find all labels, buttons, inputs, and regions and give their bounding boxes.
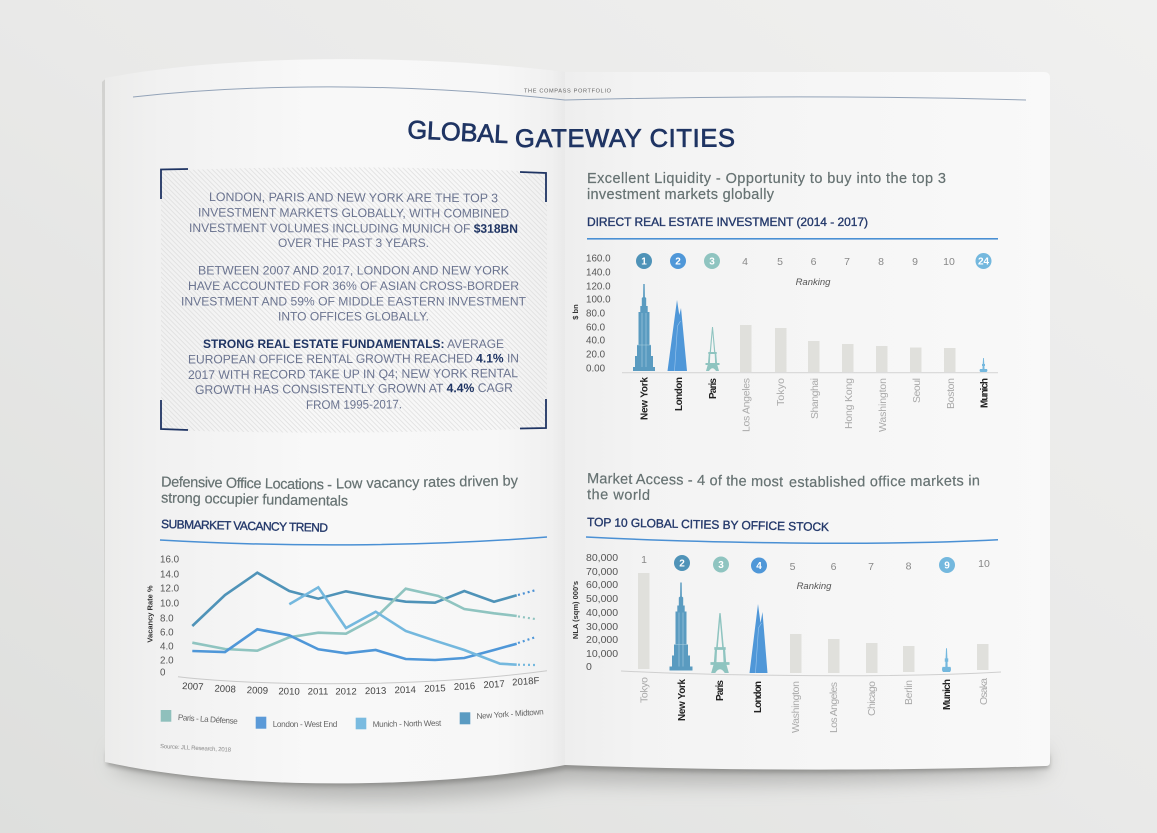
left page edge stack <box>102 78 108 762</box>
y axis labels: 60,000 <box>586 579 618 591</box>
title: GLOBAL <box>407 116 509 149</box>
y axis title: Vacancy Rate % <box>146 585 154 643</box>
rankings: 6 <box>831 561 837 573</box>
city labels: London <box>753 681 764 713</box>
y axis labels: 14.0 <box>160 570 180 580</box>
heading: investment markets globally <box>587 187 775 203</box>
x axis years: 2007 <box>182 681 204 693</box>
y axis labels <box>586 254 611 374</box>
y axis labels: 10,000 <box>586 648 618 660</box>
line: Paris - La Defense <box>192 589 535 651</box>
x axis years: 2012 <box>335 686 357 698</box>
city labels: Paris <box>715 680 726 701</box>
y axis labels: 80,000 <box>586 552 618 564</box>
rankings <box>636 253 992 269</box>
ranking caption: Ranking <box>797 581 832 592</box>
city labels: New York <box>677 679 688 721</box>
y axis labels: 2.0 <box>160 656 174 666</box>
y axis labels: 120.0 <box>586 282 611 292</box>
y axis labels: 20,000 <box>586 634 618 646</box>
y axis labels: 60.0 <box>586 322 606 334</box>
subheading: DIRECT REAL ESTATE INVESTMENT (2014 - 2017) <box>587 215 868 229</box>
paragraph 1: OVER THE PAST 3 YEARS. <box>278 236 429 250</box>
city labels: Paris <box>708 378 719 399</box>
source: Source: JLL Research, 2018 <box>160 744 232 754</box>
city labels: Los Angeles <box>740 378 752 432</box>
subheading: SUBMARKET VACANCY TREND <box>161 517 329 535</box>
y axis labels <box>160 554 180 678</box>
corner brackets <box>161 169 546 430</box>
rankings: 3 <box>709 256 715 268</box>
city labels <box>640 377 990 432</box>
paragraph 3: FROM 1995-2017. <box>306 397 402 412</box>
paragraph 1: INVESTMENT VOLUMES INCLUDING MUNICH OF $318BN <box>189 221 518 236</box>
paragraph 1: INVESTMENT MARKETS GLOBALLY, WITH COMBINED <box>198 206 509 221</box>
y axis labels: 0 <box>160 668 166 678</box>
y axis labels: 12.0 <box>160 584 180 594</box>
paragraph 3 <box>188 337 519 412</box>
x axis years: 2009 <box>247 685 268 697</box>
rankings: 8 <box>906 560 912 572</box>
y axis labels: 0 <box>586 661 592 673</box>
city labels: Hong Kong <box>843 378 855 429</box>
city labels: Tokyo <box>638 677 650 703</box>
y axis labels: 20.0 <box>586 350 606 360</box>
rankings: 1 <box>641 256 647 268</box>
rankings: 10 <box>943 256 955 268</box>
city labels: Los Angeles <box>828 682 840 733</box>
bars <box>740 325 956 372</box>
x axis years: 2013 <box>365 686 386 697</box>
header rule <box>133 87 1026 100</box>
city labels: Boston <box>945 378 957 409</box>
icon: Empire State, New York <box>633 284 655 371</box>
x axis years: 2015 <box>424 683 446 695</box>
city labels: Berlin <box>903 680 915 705</box>
panel: vacancy trend <box>146 473 547 754</box>
legend: New York - Midtown <box>476 707 544 721</box>
panel: direct real estate investment <box>571 171 998 432</box>
rankings: 5 <box>777 256 783 268</box>
y axis labels: 70,000 <box>586 566 618 578</box>
x axis years: 2010 <box>278 686 300 698</box>
y axis labels <box>586 552 618 673</box>
title: GATEWAY CITIES <box>515 125 735 153</box>
y axis labels: 100.0 <box>586 294 611 306</box>
x axis years <box>182 676 540 698</box>
city labels: Shanghai <box>809 378 821 419</box>
y axis labels: 0.00 <box>586 364 606 374</box>
title <box>407 116 735 153</box>
heading: established office markets in <box>789 473 980 491</box>
heading: Defensive Office Locations - <box>161 475 332 493</box>
city labels: Chicago <box>866 681 878 716</box>
paragraph 3: EUROPEAN OFFICE RENTAL GROWTH REACHED 4.1% IN <box>188 351 519 366</box>
y axis labels: 16.0 <box>160 554 180 566</box>
paragraph 1: LONDON, PARIS AND NEW YORK ARE THE TOP 3 <box>209 190 498 205</box>
header text: THE COMPASS PORTFOLIO <box>524 88 612 94</box>
y axis title: $ bn <box>571 304 580 320</box>
icon: Eiffel Tower, Paris <box>710 613 730 673</box>
panel: key text box <box>161 167 547 433</box>
x axis years: 2011 <box>308 686 328 698</box>
heading: Market Access - 4 of the most <box>587 471 783 490</box>
icon: tower, Munich <box>980 358 987 372</box>
city labels: Osaka <box>978 678 990 705</box>
baseline <box>622 371 998 374</box>
y axis labels: 40.0 <box>586 336 606 346</box>
rankings: 4 <box>742 256 748 268</box>
x axis years: 2008 <box>214 684 236 695</box>
ranking caption: Ranking <box>796 277 831 288</box>
rankings: 5 <box>790 561 796 573</box>
city labels: Seoul <box>911 378 923 403</box>
icon: Eiffel Tower, Paris <box>706 327 720 371</box>
legend <box>161 707 544 729</box>
icon: Empire State, New York <box>670 582 692 670</box>
city labels: Tokyo <box>775 378 787 406</box>
rankings <box>641 554 990 574</box>
city labels <box>638 677 990 733</box>
running header <box>133 87 1026 100</box>
y axis labels: 160.0 <box>586 254 611 264</box>
y axis labels: 40,000 <box>586 607 618 619</box>
legend: Munich - North West <box>373 719 442 729</box>
rankings: 4 <box>756 561 762 572</box>
paragraph 3: STRONG REAL ESTATE FUNDAMENTALS: AVERAGE <box>203 337 504 351</box>
line: Munich - North West <box>289 587 535 665</box>
x axis years: 2017 <box>483 679 505 691</box>
heading <box>587 471 980 504</box>
paragraph 2: INVESTMENT AND 59% OF MIDDLE EASTERN INVESTMENT <box>181 294 526 308</box>
city labels: Munich <box>942 679 953 710</box>
rankings: 24 <box>978 256 989 268</box>
rankings: 7 <box>868 561 874 573</box>
city labels: Munich <box>980 378 990 408</box>
y axis labels: 8.0 <box>160 614 174 624</box>
rankings: 8 <box>878 256 884 268</box>
line: London - West End <box>192 629 535 660</box>
heading: strong occupier fundamentals <box>161 491 348 510</box>
paragraph 2: INTO OFFICES GLOBALLY. <box>278 310 429 324</box>
x axis years: 2014 <box>394 685 417 696</box>
bars <box>638 573 988 673</box>
rankings: 10 <box>978 558 990 570</box>
heading <box>161 473 519 510</box>
icon: The Shard, London <box>750 604 768 673</box>
y axis labels: 6.0 <box>160 628 174 638</box>
city labels: London <box>674 377 685 411</box>
x axis years: 2018F <box>512 676 540 688</box>
rankings: 9 <box>912 256 918 268</box>
city labels: Washington <box>790 681 802 733</box>
city labels: New York <box>640 377 650 420</box>
legend: London - West End <box>273 720 338 729</box>
paragraph 2 <box>181 264 526 324</box>
baseline <box>621 671 1001 676</box>
heading: the world <box>587 487 650 504</box>
book shadow <box>107 750 1049 799</box>
rankings: 9 <box>944 560 950 572</box>
panel: top 10 office stock <box>571 471 1001 733</box>
heading: Low vacancy rates driven by <box>336 473 519 492</box>
paragraph 1 <box>189 190 518 250</box>
y axis labels: 50,000 <box>586 593 618 605</box>
paragraph 3: GROWTH HAS CONSISTENTLY GROWN AT 4.4% CAGR <box>195 381 513 397</box>
right page <box>565 72 1050 770</box>
y axis title: NLA (sqm) 000's <box>571 581 580 639</box>
rankings: 2 <box>679 558 685 570</box>
icon: tower, Munich <box>942 648 951 672</box>
rankings: 7 <box>844 256 850 268</box>
hatched background <box>161 167 547 433</box>
subheading: TOP 10 GLOBAL CITIES BY OFFICE STOCK <box>587 515 829 534</box>
y axis labels: 140.0 <box>586 268 611 278</box>
rankings: 1 <box>641 554 647 566</box>
city labels: Washington <box>877 378 889 432</box>
y axis labels: 80.0 <box>586 308 606 320</box>
rankings: 3 <box>718 560 724 571</box>
y axis labels: 4.0 <box>160 642 174 652</box>
paragraph 3: 2017 WITH RECORD TAKE UP IN Q4; NEW YORK RENTAL <box>188 366 518 382</box>
rankings: 6 <box>811 256 817 268</box>
heading: Excellent Liquidity - Opportunity to buy into the top 3 <box>587 171 946 187</box>
left page <box>105 59 565 783</box>
legend: Paris - La Défense <box>178 713 238 726</box>
icon: The Shard, London <box>668 300 687 371</box>
y axis labels: 30,000 <box>586 621 618 633</box>
heading <box>587 171 946 203</box>
y axis labels: 10.0 <box>160 598 180 610</box>
x axis <box>178 671 547 684</box>
paragraph 2: BETWEEN 2007 AND 2017, LONDON AND NEW YORK <box>198 264 510 278</box>
rankings: 2 <box>675 256 681 268</box>
line: New York - Midtown <box>192 573 535 626</box>
x axis years: 2016 <box>454 681 476 693</box>
paragraph 2: HAVE ACCOUNTED FOR 36% OF ASIAN CROSS-BORDER <box>188 279 519 293</box>
